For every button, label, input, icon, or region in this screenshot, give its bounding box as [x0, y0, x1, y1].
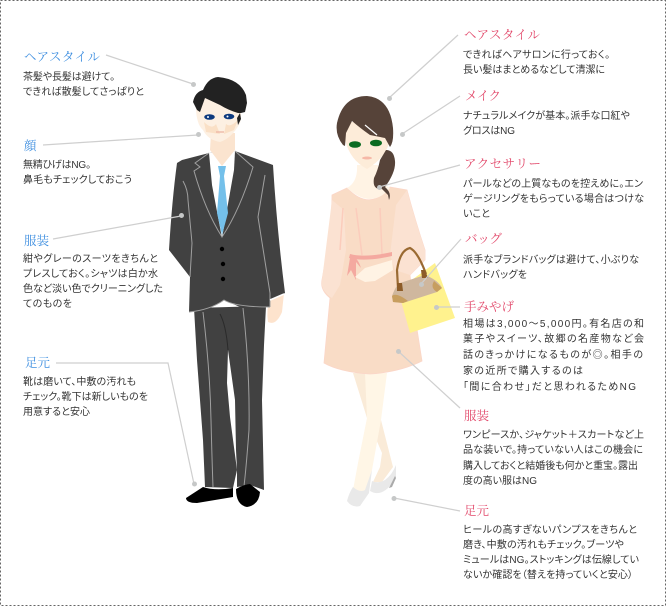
body: ミュールはNG。ストッキングは伝線してい: [463, 553, 639, 566]
text block: woman souvenir: [463, 300, 644, 393]
connector: man feet: [56, 363, 197, 486]
body: パールなどの上質なものを控えめに。エン: [463, 177, 644, 190]
body: グロスはNG: [463, 124, 515, 137]
body: 磨き、中敷の汚れもチェック。ブーツや: [463, 538, 624, 551]
head: [193, 77, 247, 166]
body: [463, 523, 639, 581]
body: 品な装いで。持っていない人はこの機会に: [463, 443, 643, 456]
shoes: [186, 484, 260, 507]
body: [463, 253, 639, 281]
body: 相場は3,000～5,000円。有名店の和: [463, 317, 644, 330]
body: [23, 158, 132, 186]
heading: メイク: [465, 89, 501, 103]
handbag: [392, 248, 442, 303]
heading: 服装: [464, 408, 489, 423]
heading: 顔: [24, 139, 37, 153]
connector: woman souvenir: [434, 305, 460, 310]
connector: woman hairstyle: [387, 35, 458, 101]
body: 靴は磨いて、中敷の汚れも: [23, 375, 136, 388]
body: 長い髪はまとめるなどして清潔に: [463, 63, 605, 76]
heading: バッグ: [465, 232, 502, 246]
body: 「間に合わせ」だと思われるためNG: [463, 380, 636, 393]
connector: man face: [43, 132, 201, 145]
neck and hand: [347, 165, 393, 282]
body: ヒールの高すぎないパンプスをきちんと: [463, 523, 637, 536]
text block: woman clothing: [463, 408, 644, 487]
body: [23, 375, 148, 418]
body: ゲージリングをもらっている場合はつけな: [463, 192, 644, 205]
dress: [322, 187, 425, 374]
body: [463, 48, 610, 76]
text block: man face: [23, 139, 132, 186]
eyes: [349, 141, 361, 148]
figure: man in suit: [169, 77, 285, 507]
body: できればヘアサロンに行っておく。: [463, 48, 610, 61]
body: [23, 70, 144, 98]
body: 無精ひげはNG。: [23, 158, 91, 171]
eyes: [204, 114, 215, 120]
text block: woman hairstyle: [463, 28, 610, 76]
body: ハンドバッグを: [463, 268, 527, 281]
trousers: [194, 306, 266, 490]
body: いこと: [463, 208, 490, 220]
heading: 服装: [24, 233, 49, 248]
connector: woman clothing: [396, 349, 460, 408]
body: てのものを: [23, 298, 72, 310]
connector: woman bag: [419, 239, 461, 287]
body: ナチュラルメイクが基本。派手な口紅や: [463, 109, 630, 122]
heading: 手みやげ: [464, 300, 514, 314]
text block: woman makeup: [463, 89, 630, 137]
connector: woman makeup: [400, 96, 460, 137]
heading: ヘアスタイル: [464, 28, 540, 42]
belt: [349, 252, 392, 260]
body: [463, 109, 630, 137]
body: [463, 177, 644, 220]
body: [463, 317, 644, 393]
body: [463, 429, 644, 487]
jacket: [169, 151, 285, 312]
text block: woman feet: [463, 504, 639, 581]
face and hair: [337, 96, 395, 200]
connector: man hairstyle: [106, 55, 196, 87]
heading: ヘアスタイル: [24, 50, 100, 64]
body: 茶髪や長髪は避けて。: [23, 70, 115, 83]
body: チェック。靴下は新しいものを: [23, 390, 148, 403]
body: プレスしておく。シャツは白か水: [23, 267, 158, 280]
hair: [193, 77, 247, 113]
connector: man clothing: [53, 213, 184, 239]
body: [23, 252, 163, 310]
body: 紺やグレーのスーツをきちんと: [23, 252, 158, 265]
body: 菓子やスイーツ、故郷の名産物など会: [463, 332, 644, 345]
body: 購入しておくと結婚後も何かと重宝。露出: [463, 459, 638, 472]
body: できれば散髪してさっぱりと: [23, 85, 144, 98]
heading: アクセサリー: [464, 157, 541, 171]
connector: woman feet: [392, 496, 460, 511]
body: 色など淡い色でクリーニングした: [23, 282, 163, 295]
necktie: [217, 166, 228, 235]
shopping bag: [398, 263, 455, 333]
legs: [353, 373, 393, 492]
text block: woman bag: [463, 232, 639, 281]
text block: man feet: [23, 356, 148, 418]
body: 派手なブランドバッグは避けて、小ぶりな: [463, 253, 639, 266]
heading: 足元: [464, 504, 489, 518]
text block: woman accessory: [463, 157, 644, 220]
text block: man hairstyle: [23, 50, 144, 98]
body: 用意すると安心: [23, 406, 90, 418]
connector: woman accessory: [377, 165, 460, 190]
shoes: [347, 465, 396, 506]
body: 話のきっかけになるものが◎。相手の: [463, 348, 643, 361]
body: ワンピースか、ジャケット＋スカートなど上: [463, 429, 644, 441]
body: 鼻毛もチェックしておこう: [23, 173, 132, 186]
text block: man clothing: [23, 233, 163, 310]
body: 度の高い服はNG: [463, 474, 537, 487]
body: 家の近所で購入するのは: [463, 364, 583, 377]
hand: [267, 293, 284, 323]
heading: 足元: [25, 356, 50, 370]
figure: woman in dress: [322, 96, 455, 506]
body: ないか確認を（替えを持っていくと安心）: [463, 568, 633, 581]
